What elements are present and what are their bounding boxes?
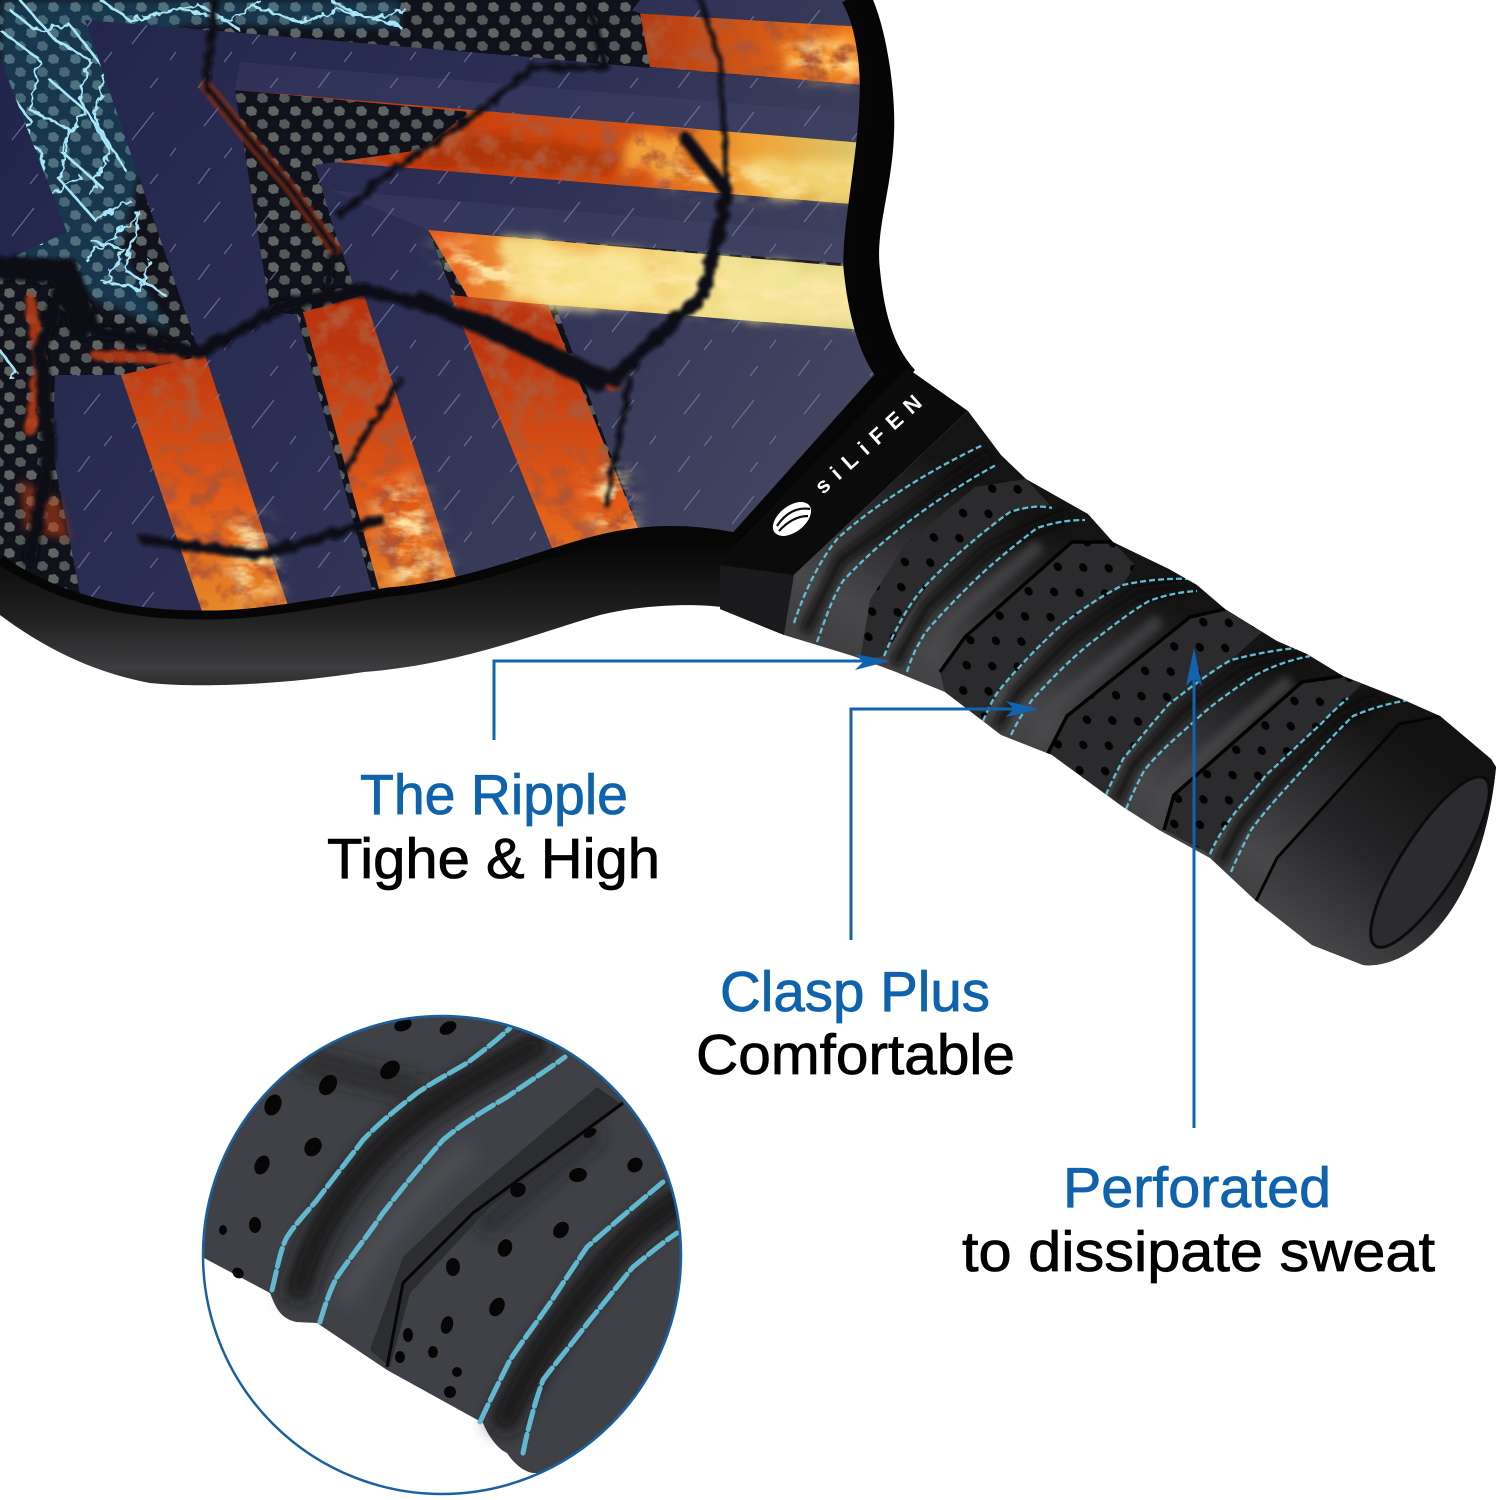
callout: clasp plus: [696, 960, 1015, 1087]
shaded ridges: [295, 1040, 690, 1430]
flame bright mottling: [225, 45, 860, 600]
mesh overlays: [0, 0, 650, 620]
paddle head: [0, 0, 915, 685]
circular grip close-up: [190, 1000, 700, 1494]
paddle frame rim: [0, 0, 915, 685]
callout: clasp plus: Comfortable: [696, 1023, 1015, 1087]
logo mark: [767, 495, 817, 543]
wrap edge lines: [940, 542, 1343, 830]
perforation holes: [860, 479, 1362, 854]
flame dark mottling: [121, 13, 864, 620]
indigo band highlights: [236, 62, 386, 100]
close-up image content: [204, 1017, 680, 1473]
wood grain dashes: [0, 0, 885, 620]
callout: perforated: to dissipate sweat: [962, 1220, 1435, 1284]
black inner rim: [0, 0, 880, 615]
grip wrap details: [794, 445, 1499, 980]
lightning bolts: [0, 0, 406, 380]
callout: the ripple: Tighe & High: [327, 827, 660, 891]
perforation dots: [219, 1016, 646, 1398]
paddle face artwork: [0, 0, 900, 640]
orange crack glow: [30, 85, 612, 430]
lightning glow: [0, 0, 400, 330]
arrow: clasp plus: [851, 701, 1039, 940]
brand collar: [720, 368, 968, 635]
grip base: [784, 411, 1496, 965]
dark cracks: [0, 0, 727, 560]
callout: perforated: Perforated: [1063, 1156, 1331, 1220]
blue stitching: [794, 445, 1409, 872]
flame swirls: [400, 40, 860, 325]
handle grip: [784, 411, 1499, 980]
callout: the ripple: [327, 763, 660, 891]
callout: the ripple: The Ripple: [360, 763, 628, 827]
end cap disc: [1352, 763, 1499, 961]
end cap body: [1256, 716, 1499, 980]
arrow: the ripple: [494, 654, 890, 740]
brand wordmark: siLiFEN: [810, 390, 927, 499]
wrap flap: [370, 1087, 623, 1367]
grey band highlights: [930, 545, 1290, 830]
perforated zones: [860, 479, 1362, 854]
blue stitching close-up: [272, 1028, 677, 1453]
arrow: perforated: [1186, 648, 1202, 1128]
indigo chevron bands: [0, 0, 885, 620]
dark ridges: [805, 455, 1378, 863]
callout: perforated: [962, 1156, 1435, 1284]
orange flame bands: [121, 13, 864, 620]
circle outline: [203, 1016, 681, 1494]
callout: clasp plus: Clasp Plus: [720, 960, 990, 1024]
